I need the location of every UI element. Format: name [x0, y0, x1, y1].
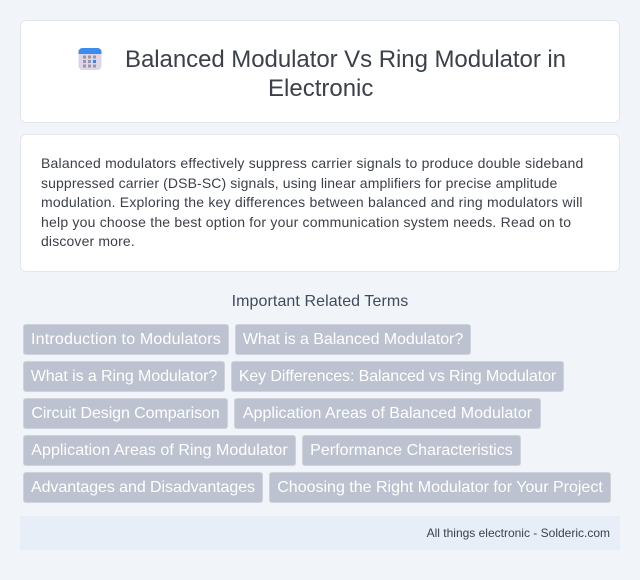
footer bar: [20, 516, 620, 550]
tag: Choosing the Right Modulator for Your Project: [277, 479, 603, 496]
intro text panel: [20, 134, 620, 272]
icon: calendar grid: [78, 48, 102, 70]
intro paragraph: help you choose the best option for your communication system needs. Read on to: [41, 214, 571, 230]
related terms heading: Important Related Terms: [232, 293, 408, 310]
tag: Application Areas of Balanced Modulator: [243, 405, 532, 422]
tag: [234, 398, 541, 429]
intro paragraph: discover more.: [41, 233, 135, 249]
intro paragraph: modulation. Exploring the key differences between balanced and ring modulators will: [41, 194, 583, 210]
tag: Performance Characteristics: [310, 442, 513, 459]
tag: What is a Balanced Modulator?: [243, 331, 463, 348]
footer credit: All things electronic - Solderic.com: [427, 526, 610, 540]
intro paragraph: suppressed carrier (DSB-SC) signals, using linear amplifiers for precise amplitude: [41, 174, 557, 190]
title: [125, 46, 566, 102]
title: Balanced Modulator Vs Ring Modulator in: [125, 46, 566, 73]
tag: [302, 435, 521, 466]
tag: [23, 361, 225, 392]
header panel: [20, 20, 620, 123]
tag: What is a Ring Modulator?: [31, 368, 217, 385]
tag: Advantages and Disadvantages: [31, 479, 255, 496]
tag: [231, 361, 564, 392]
tag: [23, 472, 263, 503]
tag: Key Differences: Balanced vs Ring Modulator: [239, 368, 556, 385]
tag: Circuit Design Comparison: [31, 405, 220, 422]
intro paragraph: Balanced modulators effectively suppress carrier signals to produce double sideband: [41, 155, 583, 171]
tag: Introduction to Modulators: [31, 331, 221, 348]
tag: [269, 472, 611, 503]
tag: [23, 398, 228, 429]
intro paragraph: [41, 155, 583, 249]
title: Electronic: [268, 75, 373, 102]
tag: Application Areas of Ring Modulator: [31, 442, 288, 459]
related terms tags: [23, 324, 611, 503]
tag: [23, 324, 229, 355]
tag: [23, 435, 296, 466]
tag: [235, 324, 471, 355]
